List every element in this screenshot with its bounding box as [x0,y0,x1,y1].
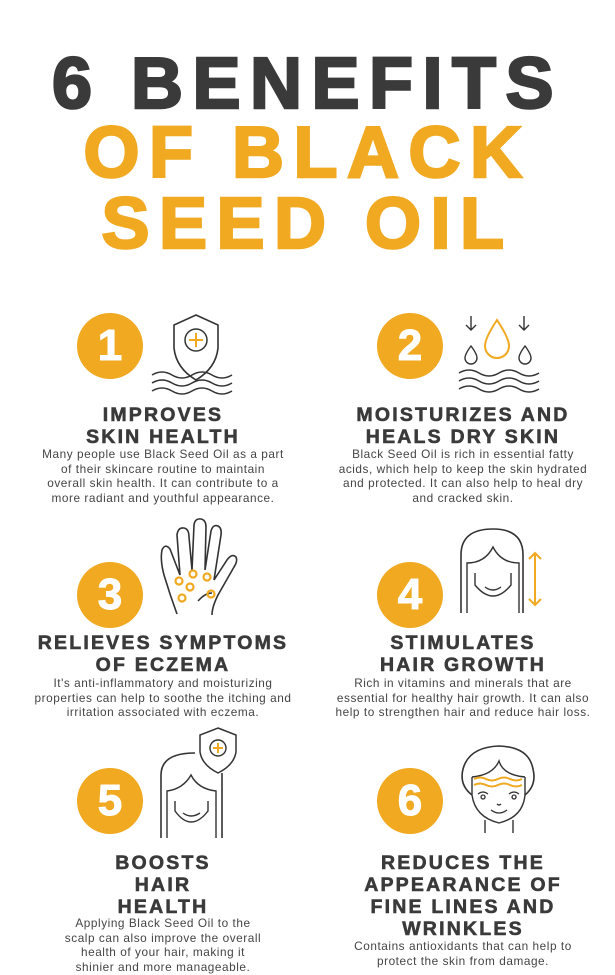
description: essential for healthy hair growth. It can also [337,690,589,704]
title line 2: OF BLACK [84,113,531,193]
heading: HAIR [135,874,191,896]
icon: shield with plus and waves [152,314,232,395]
description [65,916,261,974]
number badge 4: 4 [398,570,422,619]
title line 3: SEED OIL [101,184,514,264]
heading: APPEARANCE OF [364,874,562,896]
heading: IMPROVES [103,404,223,426]
panel: benefit 3 [35,518,291,719]
description: Many people use Black Seed Oil as a part [42,447,284,461]
heading: BOOSTS [115,852,211,874]
heading [86,404,240,448]
heading: HEALTH [118,896,208,918]
description: help to strengthen hair and reduce hair loss. [336,705,590,719]
icon: hair with shield [160,727,237,838]
description [339,447,587,504]
number badge 4 [377,562,443,628]
description: more radiant and youthful appearance. [52,490,274,504]
description: Black Seed Oil is rich in essential fatty [352,447,574,461]
heading [115,852,211,918]
description: Rich in vitamins and minerals that are [354,676,572,690]
panel: benefit 4 [336,528,590,719]
heading [356,404,570,448]
heading: SKIN HEALTH [86,426,240,448]
heading [364,852,562,940]
description: acids, which help to keep the skin hydrated [339,462,587,476]
description: of their skincare routine to maintain [61,462,265,476]
heading: RELIEVES SYMPTOMS [38,632,288,654]
description: overall skin health. It can contribute to a [47,476,279,490]
heading [380,632,546,676]
heading: WRINKLES [402,918,524,940]
number badge 1 [77,313,143,379]
panel: benefit 5 [65,727,261,974]
number badge 6 [377,768,443,834]
number badge 2 [377,313,443,379]
heading: FINE LINES AND [370,896,556,918]
panel: benefit 2 [339,313,587,504]
heading [38,632,288,676]
description: Contains antioxidants that can help to [354,939,572,953]
description [336,676,590,719]
heading: HAIR GROWTH [380,654,546,676]
description: irritation associated with eczema. [67,705,259,719]
description: protect the skin from damage. [377,954,549,968]
number badge 2: 2 [398,321,422,370]
description: shinier and more manageable. [76,960,250,974]
number badge 6: 6 [398,776,422,825]
number badge 1: 1 [98,321,122,370]
description [35,676,291,719]
number badge 3: 3 [98,570,122,619]
number badge 5: 5 [98,776,122,825]
icon: droplets and waves [458,316,540,393]
icon: hand with spots [160,518,238,615]
description: and protected. It can also help to heal dry [343,476,583,490]
heading: OF ECZEMA [96,654,230,676]
description: health of your hair, making it [81,945,245,959]
heading: HEALS DRY SKIN [366,426,560,448]
number badge 3 [77,562,143,628]
icon: long hair face with arrow [460,528,542,613]
title [52,44,563,264]
description: and cracked skin. [412,490,514,504]
description: properties can help to soothe the itching and [35,690,291,704]
description [42,447,284,504]
number badge 5 [77,768,143,834]
icon: face with forehead lines [461,745,535,833]
description [354,939,572,968]
description: Applying Black Seed Oil to the [75,916,251,930]
panel: benefit 6 [354,745,572,968]
title line 1: 6 BENEFITS [52,44,563,124]
description: scalp can also improve the overall [65,930,261,944]
heading: MOISTURIZES AND [356,404,570,426]
description: It's anti-inflammatory and moisturizing [53,676,273,690]
heading: STIMULATES [390,632,536,654]
panel: benefit 1 [42,313,284,504]
heading: REDUCES THE [381,852,545,874]
